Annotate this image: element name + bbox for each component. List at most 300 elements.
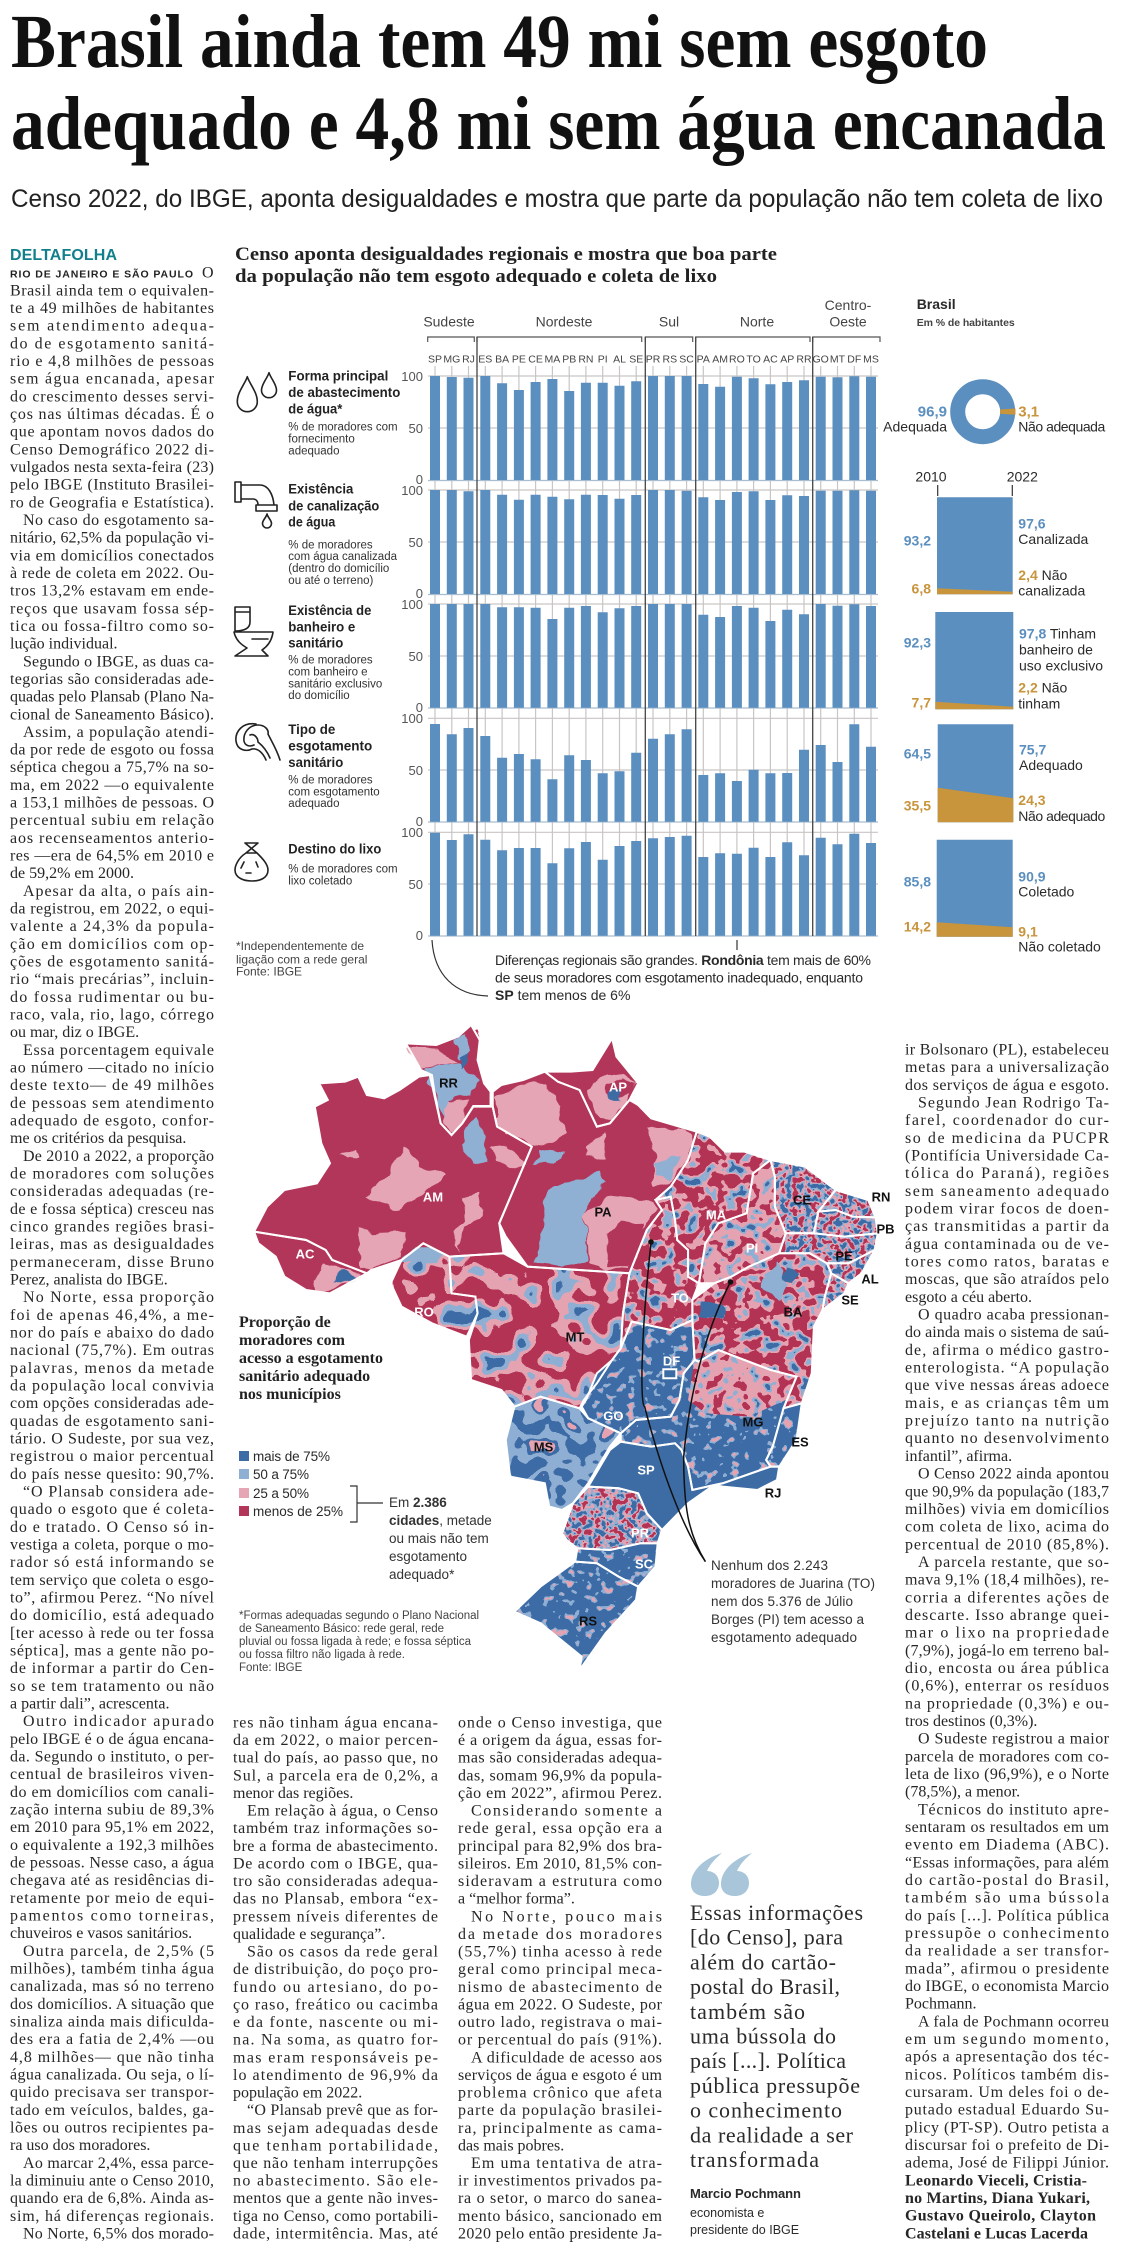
article column 5: mais, e as crianças têm um xyxy=(905,1395,1110,1412)
state labels: AC xyxy=(296,1246,315,1262)
article column 5: que vive nessas áreas adoece xyxy=(905,1377,1109,1394)
state labels: PE xyxy=(835,1248,853,1264)
article column 3: mento básico, sancionado em xyxy=(458,2208,663,2225)
article column 1: Censo Demográfico 2022 di- xyxy=(10,441,214,458)
state labels: RJ xyxy=(765,1486,781,1500)
bar chart: garbage xyxy=(435,833,871,936)
label: water supply xyxy=(288,369,400,417)
article column 1: 4,8 milhões— que não tinha xyxy=(10,2049,214,2066)
article column 3: ção em 2022”, afirmou Perez. xyxy=(458,1785,662,1802)
article column 5: O Censo 2022 ainda apontou xyxy=(918,1466,1109,1483)
article column 3: (55,7%) tinha acesso à rede xyxy=(458,1944,662,1961)
slope labels: bathroom: uso exclusivo xyxy=(1019,658,1103,674)
article column 1: cional de Saneamento Básico). xyxy=(10,706,214,723)
article column 2: São os casos da rede geral xyxy=(247,1944,439,1961)
article column 5: com coleta de lixo, acima do xyxy=(905,1519,1109,1536)
article column 1: da registrou, em 2022, o equi- xyxy=(10,901,214,918)
state labels: AM xyxy=(712,354,728,366)
article column 3 xyxy=(458,1714,663,2242)
article column 1: do crescimento desses servi- xyxy=(10,388,214,405)
article column 2: população em 2022. xyxy=(233,2084,362,2102)
article column 1: tem serviço que coleta o esgo- xyxy=(10,1572,214,1589)
quote attribution: Marcio Pochmann xyxy=(690,2186,801,2201)
article column 3: onde o Censo investiga, que xyxy=(458,1714,662,1732)
map legend: mais de 75% xyxy=(253,1449,330,1464)
quote attribution: presidente do IBGE xyxy=(690,2223,799,2237)
slope chart: garbage xyxy=(937,840,1013,937)
article column 1: Outro indicador apurado xyxy=(23,1713,214,1730)
article column 1: “O Plansab considera ade- xyxy=(23,1484,214,1501)
chart grid xyxy=(428,366,878,936)
article column 1: la diminuiu ante o Censo 2010, xyxy=(10,2172,214,2190)
slope labels: sewage xyxy=(904,741,1106,824)
article column 1: rio “mais precárias”, incluin- xyxy=(10,971,214,988)
article column 5: (Pontifícia Universidade Ca- xyxy=(905,1148,1109,1164)
article column 2: e da fonte, nascente ou mi- xyxy=(233,2014,438,2031)
state labels: ES xyxy=(478,354,492,366)
article column 3: rede geral, essa opção era a xyxy=(458,1820,662,1837)
label: sewage: esgotamento xyxy=(288,738,372,753)
callout: cities without sewage: cidades, metade xyxy=(389,1513,492,1528)
article column 2: que não tenham interrupções xyxy=(233,2155,438,2172)
article column 5: (78,5%), a menor. xyxy=(905,1784,1020,1801)
article column 1: sinaliza ainda mais dificulda- xyxy=(10,2014,214,2030)
article column 5: A fala de Pochmann ocorreu xyxy=(918,2013,1109,2030)
state labels: PR xyxy=(646,354,661,366)
y axis labels: 100 xyxy=(401,369,423,384)
panel heading: Em % de habitantes xyxy=(917,317,1015,329)
article column 1: do de esgotamento sanitá- xyxy=(10,335,214,352)
label: garbage: Destino do lixo xyxy=(288,841,381,856)
donut chart xyxy=(958,387,1016,437)
annotation text: SP tem menos de 6% xyxy=(495,987,630,1003)
state labels: CE xyxy=(793,1192,811,1208)
state labels: PB xyxy=(876,1222,895,1236)
sublabel: garbage: % de moradores com xyxy=(288,864,398,876)
region brackets xyxy=(428,337,880,342)
article column 5: tólica do Paraná), regiões xyxy=(905,1165,1109,1182)
article column 1: pelo IBGE (Instituto Brasilei- xyxy=(10,477,214,494)
chart footnote xyxy=(236,939,367,979)
article column 1: No Norte, 6,5% dos morado- xyxy=(23,2226,214,2242)
article column 1: a partir dali”, acrescenta. xyxy=(10,1696,169,1712)
article column 1: centual de brasileiros viven- xyxy=(10,1766,214,1783)
article column 1: quido precisava ser transpor- xyxy=(10,2084,214,2101)
article column 1: séptica chegou a 75,7% na so- xyxy=(10,759,214,776)
article column 1: do país nesse quesito: 90,7%. xyxy=(10,1466,214,1483)
article column 1: rador só está informando se xyxy=(10,1554,214,1571)
label: water supply: de abastecimento xyxy=(288,385,400,400)
quote text: pública pressupõe xyxy=(690,2073,860,2098)
callout: cities without sewage xyxy=(389,1495,492,1582)
slope labels: plumbing: Canalizada xyxy=(1018,531,1089,547)
panel: row labels and icons xyxy=(234,369,400,979)
article column 5: (7,9%), jogá-lo em terreno bal- xyxy=(905,1642,1109,1659)
article column 1: leiras, mas as desigualdades xyxy=(10,1236,214,1253)
bar chart: bathroom xyxy=(435,604,871,708)
region headers xyxy=(423,297,872,330)
donut labels: 3,1 xyxy=(1018,404,1039,421)
article column 1: ro de Geografia e Estatística). xyxy=(10,494,214,511)
article column 3: Considerando somente a xyxy=(471,1803,662,1820)
state labels: MG xyxy=(743,1414,763,1430)
sublabel: sewage: adequado xyxy=(288,798,339,810)
article column 1: vulgados nesta sexta-feira (23) xyxy=(10,459,214,476)
article column 1: com opções consideradas ade- xyxy=(10,1395,214,1412)
large municipality patches xyxy=(313,1028,800,1320)
label: plumbing: de canalização xyxy=(288,499,379,514)
state labels: PR xyxy=(631,1526,650,1540)
map footnote: Fonte: IBGE xyxy=(239,1662,303,1674)
article column 5: dos serviços de água e esgoto. xyxy=(905,1077,1109,1094)
article column 3: or percentual do país (91%). xyxy=(458,2032,662,2049)
article column 1: de moradores com soluções xyxy=(10,1166,214,1183)
chart heading: da população não tem esgoto adequado e coleta de lixo xyxy=(235,267,717,287)
quote text: além do cartão- xyxy=(690,1949,836,1974)
article column 1: registrou o maior percentual xyxy=(10,1448,215,1465)
article column 5: Castelani e Lucas Lacerda xyxy=(905,2225,1088,2242)
state labels: SP xyxy=(428,354,442,366)
article column 1 xyxy=(10,265,215,2243)
article column 1: da. Segundo o instituto, o per- xyxy=(10,1748,214,1766)
y axis labels: 50 xyxy=(409,649,423,664)
title xyxy=(11,0,1106,166)
quote attribution xyxy=(690,2186,801,2237)
article column 1: chuveiros e vasos sanitários. xyxy=(10,1925,192,1942)
slope labels: garbage: Coletado xyxy=(1018,884,1075,900)
leader lines xyxy=(642,1242,731,1562)
state labels: MT xyxy=(830,354,846,366)
choropleth map of Brazil xyxy=(254,1025,895,1670)
article column 5: descarte. Isso abrange quei- xyxy=(905,1607,1109,1624)
panel heading xyxy=(917,296,1015,329)
slope labels: garbage: Não coletado xyxy=(1018,939,1101,955)
article column 1: te a 49 milhões de habitantes xyxy=(10,300,214,317)
callout: Juarina and Júlio Borges: Borges (PI) tem acesso a xyxy=(711,1612,864,1627)
article column 3: serviços de água e esgoto é um xyxy=(458,2067,663,2084)
quote text: país [...]. Política xyxy=(690,2048,846,2073)
article column 1: água canalizada. Ou seja, o lí- xyxy=(10,2066,214,2084)
slope chart: plumbing xyxy=(937,497,1013,594)
annotation arrow xyxy=(432,940,737,996)
article column 1: ços nas últimas décadas. É o xyxy=(10,404,214,423)
article column 3: parte da população brasilei- xyxy=(458,2102,662,2119)
article column 1: Apesar da alta, o país ain- xyxy=(23,883,214,900)
state labels: RJ xyxy=(462,354,475,366)
state labels: BA xyxy=(495,354,509,366)
article column 5: corria a diferentes ações de xyxy=(905,1589,1109,1606)
sublabel: plumbing: % de moradores xyxy=(288,539,373,551)
article column 1: Perez, analista do IBGE. xyxy=(10,1272,168,1289)
article column 5: Pochmann. xyxy=(905,1996,977,2013)
pull quote xyxy=(690,1853,863,2237)
quote attribution: economista e xyxy=(690,2206,764,2220)
article column 2 xyxy=(233,1714,439,2242)
state labels: SE xyxy=(841,1292,859,1308)
y axis labels: 100 xyxy=(401,483,423,498)
slope labels: bathroom: tinham xyxy=(1018,696,1060,712)
article column 1: quadas pelo Plansab (Plano Na- xyxy=(10,689,214,706)
slope labels: plumbing: 6,8 xyxy=(912,580,931,596)
article column 1: ma, em 2022 —o equivalente xyxy=(10,777,214,794)
map heading: Proporção de xyxy=(239,1314,331,1331)
article column 2: res não tinham água encana- xyxy=(233,1714,438,1732)
state labels: MS xyxy=(534,1440,554,1454)
state labels: SC xyxy=(635,1556,654,1572)
article column 1: o equivalente a 192,3 milhões xyxy=(10,1837,214,1854)
slope labels: plumbing: canalizada xyxy=(1018,583,1085,599)
state labels: PA xyxy=(697,354,710,366)
label: sewage xyxy=(288,722,372,770)
label: water supply: de água* xyxy=(288,402,343,417)
article column 1: ao número —citado no início xyxy=(10,1060,214,1077)
chart footnote: Fonte: IBGE xyxy=(236,965,302,979)
slope labels: sewage: 35,5 xyxy=(904,798,931,814)
sublabel: bathroom: % de moradores xyxy=(288,654,373,666)
subtitle: Censo 2022, do IBGE, aponta desigualdades e mostra que parte da população não tem coleta de lixo xyxy=(11,185,1103,213)
article column 5: leta de lixo (96,9%), e o Norte xyxy=(905,1766,1109,1783)
article column 2: da em 2022, o maior percen- xyxy=(233,1732,438,1749)
state borders xyxy=(254,1025,878,1670)
map footnote: de Saneamento Básico: rede geral, rede xyxy=(239,1623,444,1635)
article column 2: das no Plansab, embora “ex- xyxy=(233,1891,438,1908)
y axis labels: 100 xyxy=(401,597,423,612)
article column 1: tado em veículos, baldes, ga- xyxy=(10,2102,214,2119)
map footnote: pluvial ou fossa ligada à rede; e fossa séptica xyxy=(239,1636,472,1648)
state labels: DF xyxy=(847,354,861,366)
article column 1: Ao marcar 2,4%, essa parce- xyxy=(23,2155,214,2172)
quote text: [do Censo], para xyxy=(690,1925,843,1950)
article column 2: fundo ou artesiano, do po- xyxy=(233,1979,438,1996)
y axis labels: 0 xyxy=(416,928,423,943)
article column 5: pressupõe o conhecimento xyxy=(905,1925,1109,1942)
article column 1: tário. O Sudeste, por sua vez, xyxy=(10,1431,214,1448)
article column 1: canalizada, mas só no terreno xyxy=(10,1978,214,1995)
state labels: AL xyxy=(613,354,626,366)
sublabel: water supply: fornecimento xyxy=(288,434,355,446)
state labels: MG xyxy=(443,354,460,366)
article column 5: prejuízo tanto na nutrição xyxy=(905,1413,1109,1430)
article column 3: Em uma tentativa de atra- xyxy=(471,2155,662,2172)
y axis labels: 0 xyxy=(416,700,423,715)
sublabel: water supply xyxy=(288,422,398,458)
article column 1: de informar a partir do Cen- xyxy=(10,1660,214,1677)
article column 1: nitário, 62,5% da população vi- xyxy=(10,530,214,547)
label: water supply: Forma principal xyxy=(288,369,388,384)
article column 1: sim, há diferenças regionais. xyxy=(10,2208,214,2225)
state labels: MA xyxy=(545,354,560,366)
y axis labels: 0 xyxy=(416,586,423,601)
map footnote: ou fossa filtro não ligada à rede. xyxy=(239,1649,405,1661)
state labels: RS xyxy=(663,354,677,366)
quote text: uma bússola do xyxy=(690,2024,836,2048)
article column 1: pelo IBGE é o de água encana- xyxy=(10,1731,214,1748)
article column 3: a “melhor forma”. xyxy=(458,1891,575,1908)
article column 3: outro lado, registrava o mai- xyxy=(458,2014,662,2031)
slope labels: plumbing: 93,2 xyxy=(904,533,931,549)
article column 2: menor das regiões. xyxy=(233,1785,353,1802)
label: plumbing xyxy=(288,481,379,530)
sublabel: garbage: lixo coletado xyxy=(288,875,352,887)
quote text: Essas informações xyxy=(690,1900,863,1925)
slope labels: garbage: 14,2 xyxy=(904,919,931,935)
donut labels: 96,9 xyxy=(918,404,947,421)
article column 1: nacional (75,7%). Em outras xyxy=(10,1342,214,1359)
article column 1: do e tratado. O Censo só in- xyxy=(10,1519,214,1536)
article column 5: após a apresentação dos téc- xyxy=(905,2049,1109,2066)
y axis labels: 50 xyxy=(409,421,423,436)
article column 2: de distribuição, do poço pro- xyxy=(233,1961,438,1978)
article column 5: Segundo Jean Rodrigo Ta- xyxy=(918,1094,1109,1112)
article column 1: No caso do esgotamento sa- xyxy=(23,512,214,529)
state labels: SE xyxy=(629,354,643,366)
article column 5: podem virar focos de doen- xyxy=(905,1200,1109,1218)
article column 1: foi de apenas 46,4%, a me- xyxy=(10,1307,214,1324)
article column 5: tros destinos (0,3%). xyxy=(905,1713,1037,1730)
article column 5: mar o lixo na propriedade xyxy=(905,1625,1109,1642)
y axis labels: 100 xyxy=(401,711,423,726)
label: bathroom: sanitário xyxy=(288,636,343,651)
article column 1: vestiga a coleta, porque o mo- xyxy=(10,1537,214,1554)
article column 1: sem atendimento adequa- xyxy=(10,318,214,335)
article column 3: da metade dos moradores xyxy=(458,1926,662,1943)
state labels: AM xyxy=(423,1190,443,1204)
callout: Juarina and Júlio Borges: nem dos 5.376 de Júlio xyxy=(711,1594,853,1609)
article column 1: de 59,2% em 2000. xyxy=(10,865,134,882)
slope labels: sewage: Não adequado xyxy=(1018,808,1106,824)
article column 5: so de medicina da PUCPR xyxy=(905,1130,1109,1147)
section tag: Deltafolha: DELTAFOLHA xyxy=(10,247,117,264)
y axis labels: 50 xyxy=(409,535,423,550)
article column 3: mas são consideradas adequa- xyxy=(458,1750,662,1767)
icon: garbage bag xyxy=(235,843,268,881)
article column 2: “O Plansab prevê que as for- xyxy=(247,2102,438,2119)
article column 5: água contaminada ou de ve- xyxy=(905,1236,1109,1253)
article column 5: do ainda mais o sistema de saú- xyxy=(905,1324,1109,1341)
sublabel: plumbing: ou até o terreno) xyxy=(288,575,373,587)
article column 2: qualidade e segurança”. xyxy=(233,1926,385,1943)
region headers: Oeste xyxy=(829,314,867,330)
article column 1: da por rede de esgoto ou fossa xyxy=(10,742,214,759)
article column 5: farel, coordenador do cur- xyxy=(905,1112,1109,1129)
state labels: PE xyxy=(512,354,526,366)
quote text: postal do Brasil, xyxy=(690,1974,840,1999)
slope labels: garbage: 90,9 xyxy=(1018,869,1046,885)
article column 1: adequado de esgoto, confor- xyxy=(10,1113,214,1130)
article column 2: ço raso, freático ou cacimba xyxy=(233,1996,438,2013)
annotation text xyxy=(495,952,871,1003)
article column 5: no Martins, Diana Yukari, xyxy=(905,2190,1090,2207)
article column 1: deste texto— de 49 milhões xyxy=(10,1077,214,1094)
state labels: PI xyxy=(746,1240,758,1256)
article column 5: parcela de moradores com co- xyxy=(905,1748,1109,1765)
article column 1: retamente por meio de equi- xyxy=(10,1890,214,1907)
article column 1: ou mar, diz o IBGE. xyxy=(10,1024,139,1041)
article column 5: de, afirma o médico gastro- xyxy=(905,1342,1109,1359)
article column 5: também são uma bússola xyxy=(905,1890,1109,1907)
state labels: SP xyxy=(637,1462,655,1478)
article column 1: nor do país e abaixo do dado xyxy=(10,1325,214,1342)
state labels: PA xyxy=(594,1204,612,1220)
chart footnote: ligação com a rede geral xyxy=(236,952,367,966)
icon: water drops xyxy=(237,373,276,412)
article column 5: metas para a universalização xyxy=(905,1059,1109,1076)
y axis labels: 50 xyxy=(409,877,423,892)
article column 1: Assim, a população atendi- xyxy=(23,724,214,741)
bar chart: sewage xyxy=(435,724,871,822)
annotation text: Diferenças regionais são grandes. Rondônia tem mais de 60% xyxy=(495,952,871,968)
state labels: RN xyxy=(578,354,593,366)
article column 1: do fossa rudimentar ou bu- xyxy=(10,989,214,1006)
bar chart: plumbing xyxy=(435,490,871,594)
quote text: transformada xyxy=(690,2147,819,2172)
article column 2: Em relação à água, o Censo xyxy=(247,1803,438,1820)
y axis labels: 0 xyxy=(416,814,423,829)
label: bathroom xyxy=(288,603,372,651)
article column 3: é a origem da água, essas for- xyxy=(458,1732,662,1749)
quote text: também são xyxy=(690,1999,805,2024)
article column 5: da realidade a ser transfor- xyxy=(905,1943,1109,1960)
article column 5: putado estadual Eduardo Su- xyxy=(905,2102,1109,2119)
slope labels: plumbing: 97,6 xyxy=(1018,515,1046,531)
slope labels: bathroom: 97,8 Tinham xyxy=(1019,625,1096,641)
article column 2: lo atendimento de 96,9% da xyxy=(233,2067,438,2084)
article column 3: ir investimentos privados pa- xyxy=(458,2173,662,2190)
article column 5: “Essas informações, para além xyxy=(905,1854,1110,1871)
state labels: ES xyxy=(791,1434,809,1450)
article column 1: quadas de esgotamento sani- xyxy=(10,1413,214,1430)
state labels: RO xyxy=(414,1304,434,1320)
region headers: Norte xyxy=(740,314,774,330)
article column 5: ir Bolsonaro (PL), estabeleceu xyxy=(905,1042,1109,1058)
article column 1: [ter acesso à rede ou ter fossa xyxy=(10,1625,214,1642)
article column 1: ra uso dos moradores. xyxy=(10,2137,150,2154)
article column 3: das mais pobres. xyxy=(458,2137,564,2154)
article column 3: das, somam 96,9% da popula- xyxy=(458,1767,662,1784)
panel: bar charts by state xyxy=(401,297,880,1003)
article column 1: que apontam novos dados do xyxy=(10,424,214,441)
state labels: BA xyxy=(784,1304,803,1320)
annotation text: de seus moradores com esgotamento inadequado, enquanto xyxy=(495,970,863,986)
article column 5: Leonardo Vieceli, Cristia- xyxy=(905,2172,1087,2189)
article column 2: mas eram responsáveis pe- xyxy=(233,2049,438,2066)
map heading: sanitário adequado xyxy=(239,1368,370,1385)
article column 1: res —era de 64,5% em 2010 e xyxy=(10,848,214,865)
article column 5: (0,6%), enterrar os resíduos xyxy=(905,1678,1109,1695)
state labels xyxy=(428,354,879,366)
state labels: MS xyxy=(863,354,879,366)
article column 5: sem saneamento adequado xyxy=(905,1183,1109,1200)
article column 5: milhões) vivia em domicílios xyxy=(905,1501,1109,1518)
icon: sewage pipe xyxy=(236,724,280,760)
map footnote: *Formas adequadas segundo o Plano Nacional xyxy=(239,1610,479,1622)
article column 3: nismo de abastecimento de xyxy=(458,1979,662,1996)
state labels: TO xyxy=(671,1290,689,1306)
article column 1: O xyxy=(202,265,214,282)
label: sewage: Tipo de xyxy=(288,722,336,737)
y axis labels: 100 xyxy=(401,825,423,840)
article column 1: quando era de 6,8%. Ainda as- xyxy=(10,2190,214,2207)
chart heading: Censo aponta desigualdades regionais e mostra que boa parte xyxy=(235,245,777,265)
article column 1: pamentos como torneiras, xyxy=(10,1908,214,1924)
label: sewage: sanitário xyxy=(288,755,343,770)
panel heading: Brasil xyxy=(917,296,956,312)
donut labels: Não adequada xyxy=(1018,419,1106,435)
state labels: AL xyxy=(861,1272,879,1286)
sublabel: water supply: adequado xyxy=(288,446,339,458)
article column 3: problema crônico que afeta xyxy=(458,2084,662,2102)
article column 5: na propriedade (0,3%) e ou- xyxy=(905,1695,1109,1712)
